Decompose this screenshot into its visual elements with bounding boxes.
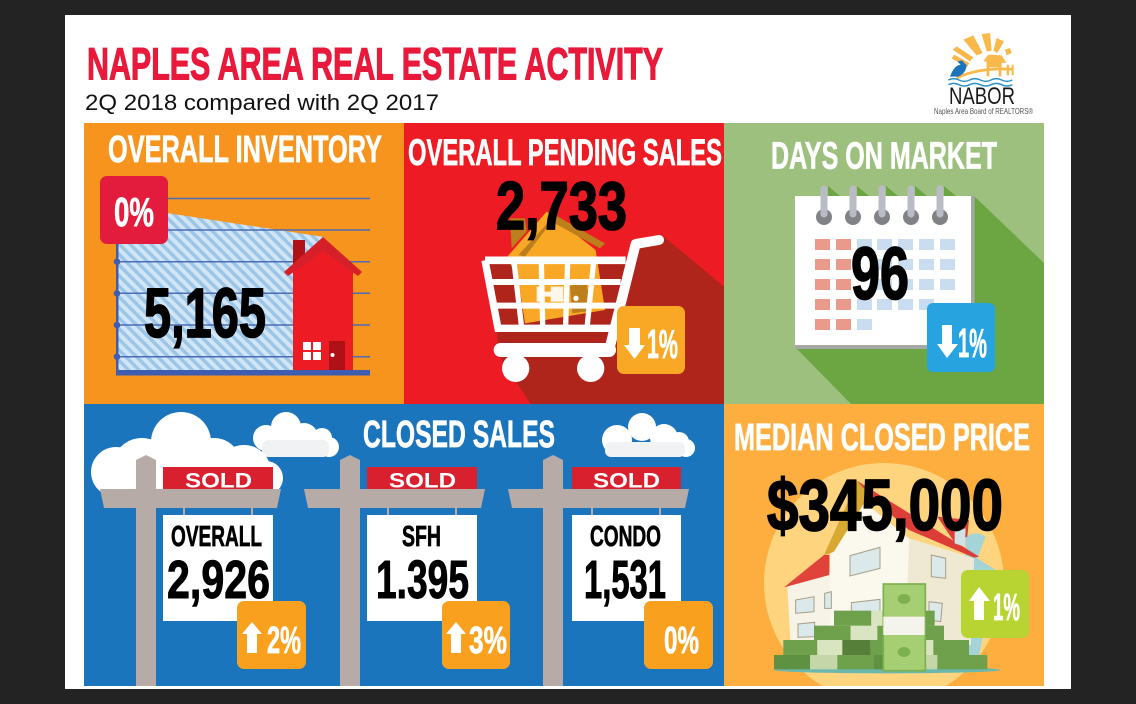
sign: condo: CONDO	[590, 521, 661, 553]
logo: NABOR: NABOR	[949, 83, 1015, 110]
badge: up 1%	[961, 570, 1029, 638]
illustration: house and money	[774, 481, 1001, 673]
logo: NABOR: Naples Area Board of REALTORS®	[934, 106, 1034, 116]
panel: days on market	[724, 123, 1044, 404]
badge: down 1%: 1%	[647, 321, 678, 367]
panel: overall inventory	[84, 123, 404, 404]
heading: overall inventory: OVERALL INVENTORY	[108, 129, 382, 171]
sign: overall: 2,926	[167, 550, 270, 610]
sign: condo: 1,531	[584, 550, 666, 610]
badge: up 1%: 1%	[993, 587, 1020, 629]
badge: 0%	[100, 176, 168, 244]
sign: SFH: SFH	[402, 521, 441, 553]
chart: inventory area chart	[114, 198, 370, 376]
heading: overall pending sales: OVERALL PENDING SALES	[408, 132, 722, 173]
subtitle: 2Q 2018 compared with 2Q 2017	[85, 90, 439, 115]
value: $345,000: $345,000	[767, 466, 1003, 546]
panel: overall pending sales	[404, 123, 724, 404]
sign: SFH: SOLD	[389, 470, 456, 492]
sign: SFH: 3%	[469, 620, 507, 662]
value: 5,165: 5,165	[144, 274, 266, 352]
badge: 0%: 0%	[114, 189, 154, 235]
value: 2,733: 2,733	[496, 168, 627, 244]
logo: NABOR	[934, 33, 1034, 116]
sign: condo: SOLD	[593, 470, 660, 492]
value: 96: 96	[851, 232, 909, 315]
icon: red house	[284, 237, 362, 370]
heading: days on market: DAYS ON MARKET	[771, 136, 997, 178]
sign: overall	[100, 455, 306, 686]
sign: SFH: 1.395	[376, 550, 469, 610]
icon: calendar	[795, 186, 974, 349]
sign: overall: SOLD	[185, 470, 252, 492]
sign: overall: 2%	[267, 620, 301, 662]
panel: median closed price	[724, 404, 1044, 703]
badge: down 1%	[617, 306, 685, 374]
sign: overall: OVERALL	[171, 521, 262, 553]
badge: down 1%	[927, 303, 995, 372]
title: NAPLES AREA REAL ESTATE ACTIVITY	[87, 38, 663, 90]
panel: closed sales	[84, 404, 724, 686]
sign: condo	[508, 455, 713, 686]
icon: clouds	[91, 412, 695, 499]
sign: SFH	[304, 455, 510, 686]
sign: condo: 0%	[664, 620, 699, 662]
badge: down 1%: 1%	[958, 320, 987, 366]
icon: shopping cart with house	[484, 212, 724, 404]
heading: closed sales: CLOSED SALES	[363, 414, 555, 456]
